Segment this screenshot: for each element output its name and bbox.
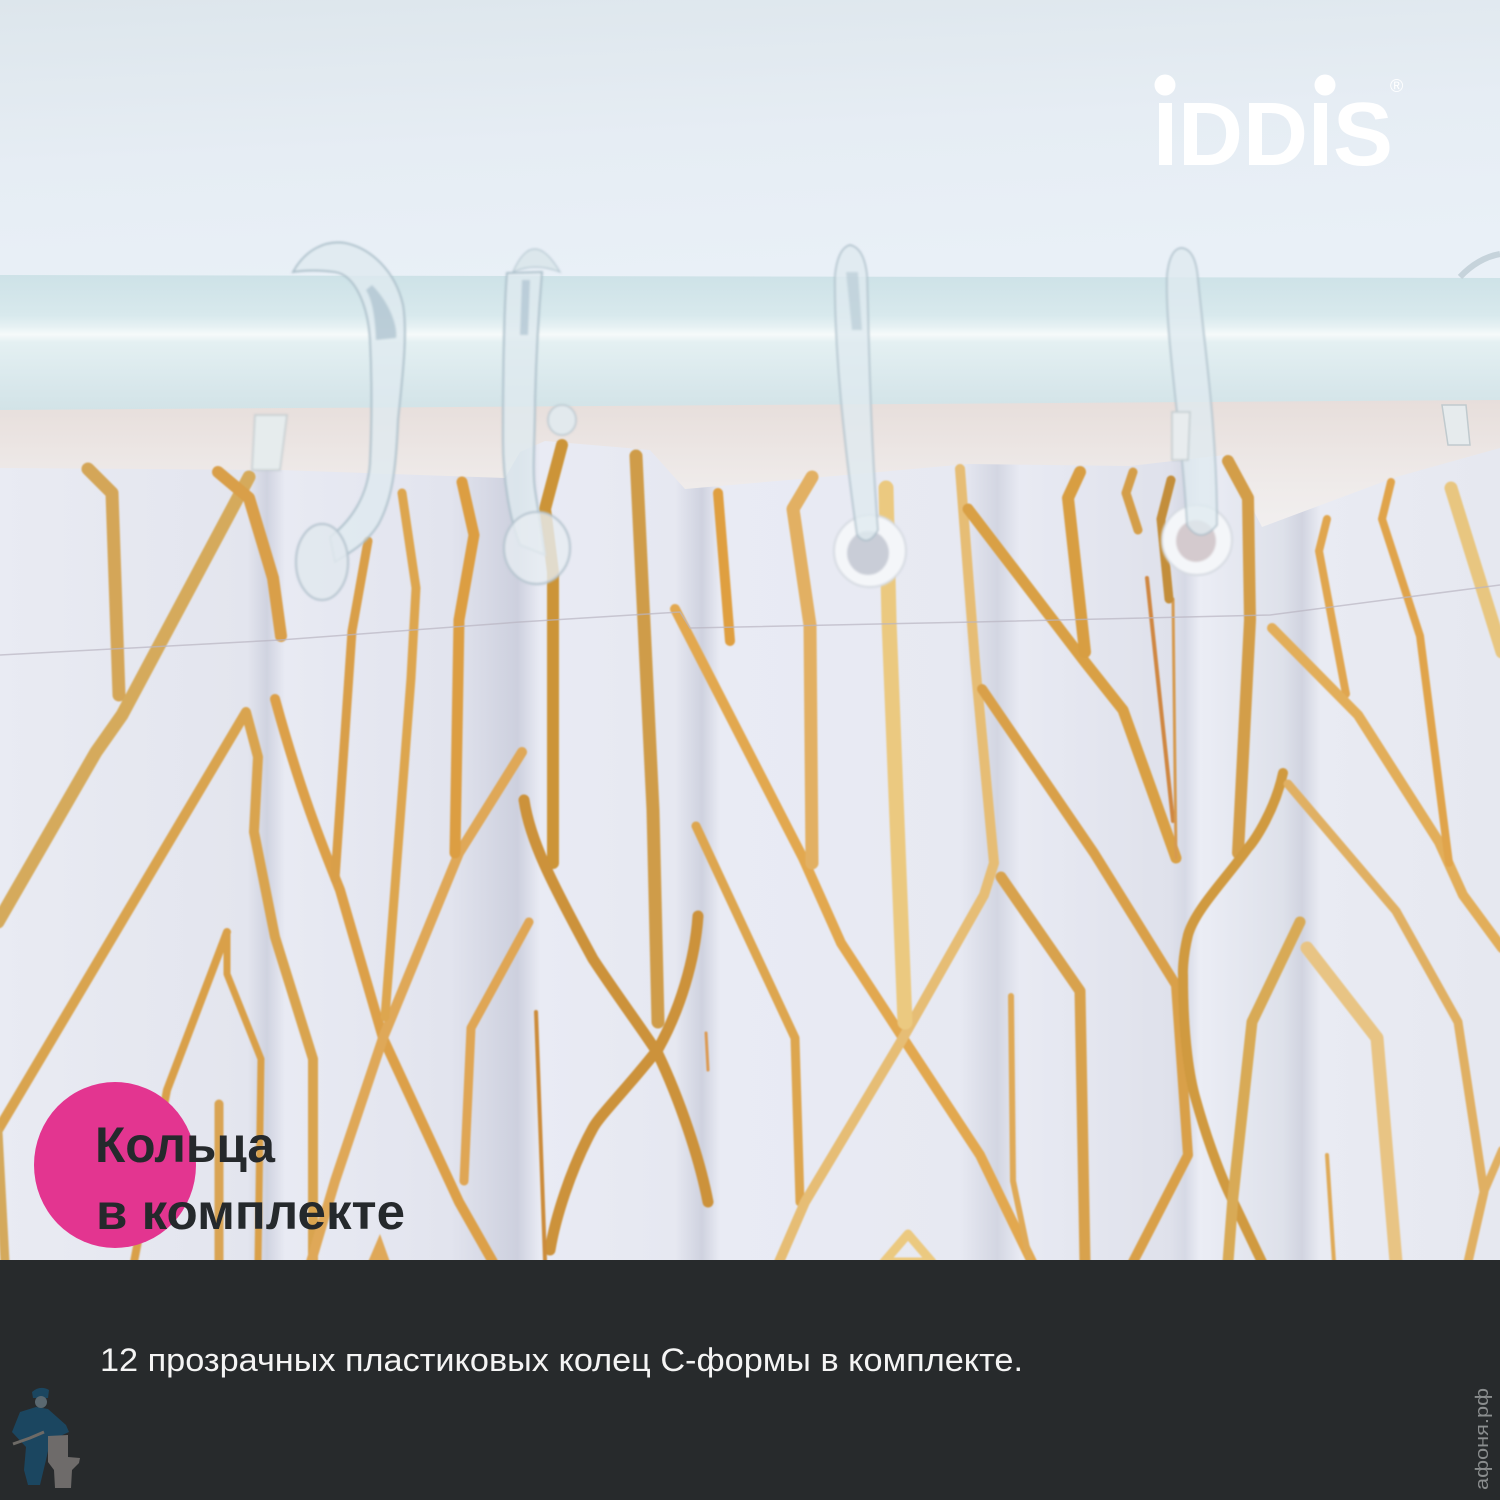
heading line 1: Кольца bbox=[95, 1117, 276, 1173]
icon: plumber leaning on toilet watermark bbox=[12, 1388, 80, 1488]
bottom dark band bbox=[0, 1260, 1500, 1500]
decorative pink circle bbox=[34, 1082, 196, 1248]
ring 5 partially visible bbox=[1442, 254, 1500, 445]
ring 3 bbox=[834, 245, 906, 587]
curtain rings bbox=[252, 242, 1500, 600]
toilet bbox=[48, 1435, 80, 1488]
plumber figure bbox=[12, 1388, 69, 1485]
heading line 2: в комплекте bbox=[96, 1184, 405, 1240]
watermark: site name: афоня.рф bbox=[1472, 1388, 1492, 1490]
pale strip below the rod bbox=[0, 400, 1500, 570]
background: blind behind the rod bbox=[0, 0, 1500, 290]
registered mark: ® bbox=[1390, 76, 1403, 96]
gold line pattern bbox=[0, 445, 1500, 1262]
ring 2 bbox=[252, 249, 576, 584]
wrench bbox=[13, 1432, 44, 1444]
ring 4 bbox=[1162, 248, 1232, 575]
logo: IDDIS bbox=[1153, 74, 1403, 185]
plumber face bbox=[35, 1396, 47, 1408]
description text: 12 прозрачных пластиковых колец С-формы в комплекте. bbox=[100, 1342, 1023, 1378]
curtain rod bbox=[0, 275, 1500, 410]
ring 1 bbox=[293, 242, 405, 600]
heading bbox=[95, 1117, 405, 1240]
seam stitching line bbox=[0, 585, 1500, 655]
logo dots bbox=[1154, 74, 1336, 96]
logo wordmark: IDDIS bbox=[1153, 85, 1393, 185]
curtain fabric bbox=[0, 441, 1500, 1260]
panel: curtain with gold geometric pattern bbox=[0, 441, 1500, 1262]
